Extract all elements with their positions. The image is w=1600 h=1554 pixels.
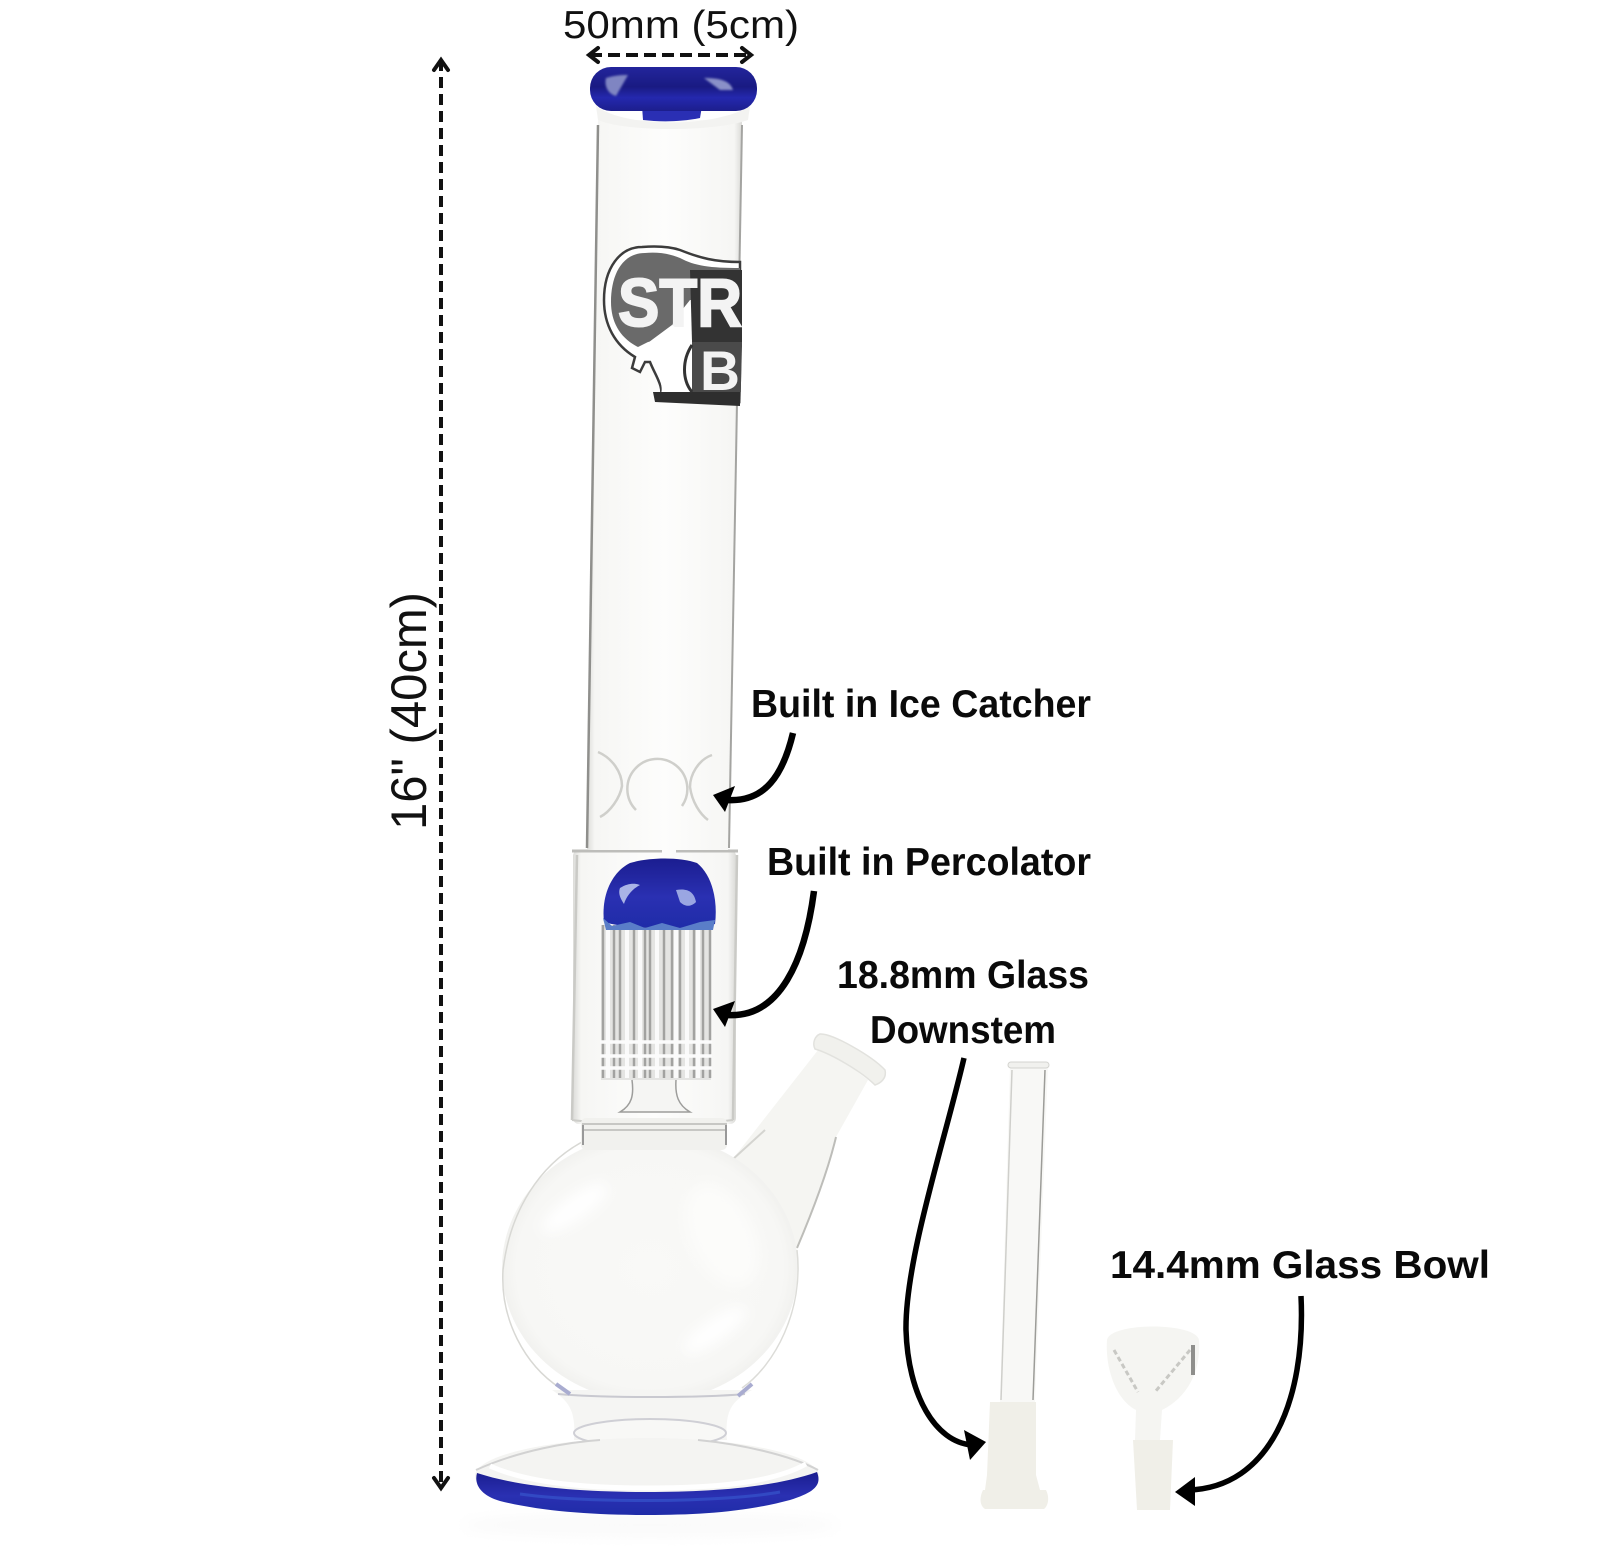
foot base (475, 1438, 819, 1515)
floor shadow (460, 1513, 840, 1537)
globe chamber (502, 1134, 798, 1402)
Strong Bongs logo: STR (618, 265, 742, 341)
side arm (732, 1034, 885, 1250)
Strong Bongs logo: B (700, 339, 740, 402)
arrow: ice catcher (713, 733, 793, 812)
neck joint (581, 1118, 727, 1150)
label: glass bowl: 14.4mm Glass Bowl (1110, 1244, 1490, 1287)
foot blue rim (476, 1472, 819, 1515)
label: downstem: 18.8mm Glass (837, 954, 1089, 997)
percolator blue dome (603, 858, 716, 930)
blue rim (590, 67, 757, 129)
ice catcher (598, 752, 712, 820)
glass downstem (981, 1062, 1049, 1509)
foot neck (552, 1384, 752, 1447)
label: downstem: Downstem (870, 1009, 1056, 1052)
label: ice catcher: Built in Ice Catcher (751, 683, 1091, 726)
width label: 50mm (5cm) (563, 4, 799, 47)
Strong Bongs logo (604, 246, 742, 406)
height dimension arrow (434, 60, 448, 1488)
main glass bong (460, 67, 885, 1537)
width dimension arrow (589, 48, 751, 62)
arrow: percolator (713, 891, 814, 1027)
percolator arms (600, 925, 712, 1112)
arrow: glass bowl (1175, 1296, 1301, 1506)
glass bowl (1107, 1326, 1199, 1510)
label: downstem (837, 954, 1089, 1052)
height label: 16" (40cm) (381, 592, 437, 830)
main tube (587, 120, 742, 850)
label: percolator: Built in Percolator (767, 841, 1091, 884)
arrow: downstem (906, 1058, 986, 1460)
perc chamber (572, 850, 738, 1124)
